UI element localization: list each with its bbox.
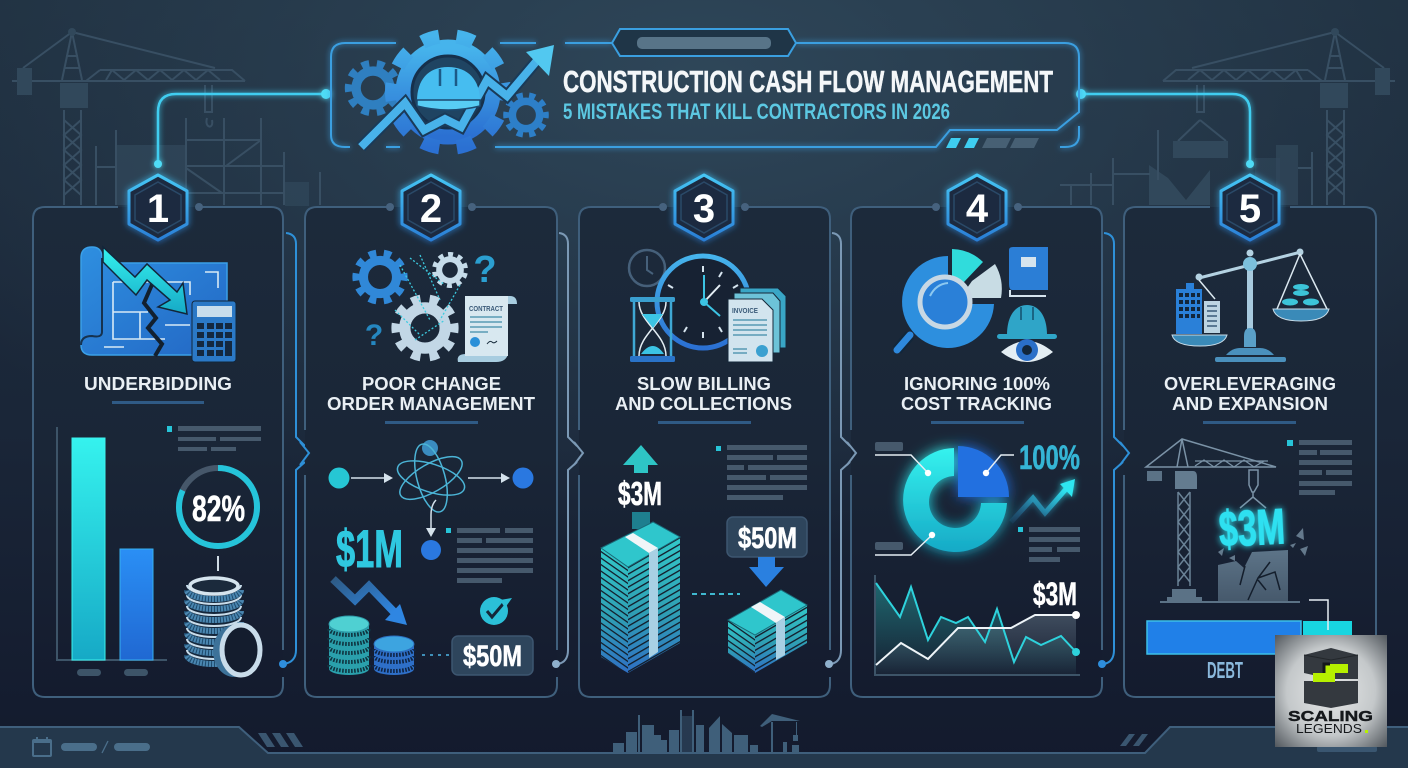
text placeholder lines [446,528,533,583]
icon: coin stack [187,578,260,677]
heading: ORDER MANAGEMENT [327,394,535,414]
debt bar: DEBT [1207,657,1243,683]
value box: $50M: $50M [463,640,522,673]
icon: blueprint, falling arrow, calculator [81,247,236,362]
logo wordmark: SCALING [1288,709,1373,725]
header corner ticks [946,138,1039,148]
value box: $50M with down arrow: $50M [738,522,797,555]
value box: $50M [452,636,533,675]
badge 4: 4 [966,187,989,231]
badge 2 [402,175,460,240]
heading: IGNORING 100% [904,374,1050,394]
badge 3 [675,175,733,240]
value box: $50M with down arrow [727,517,807,587]
panel 1: underbidding [33,175,305,697]
dotted connector [422,654,452,656]
panel frame [33,203,305,697]
background construction scene: left crane and scaffolding [12,28,320,206]
badge 5 [1221,175,1279,240]
icon: broken gears, question marks, contract [356,249,517,362]
text placeholder lines [167,426,261,451]
badge 2: 2 [420,187,442,231]
footer right pill [1317,746,1377,752]
panel 2: poor change order management [300,175,577,697]
connector lines from header to step 1 and step 5 [154,89,1254,168]
icon: calendar [32,737,52,757]
footer stripes left [258,733,303,747]
heading: UNDERBIDDING [84,374,232,394]
heading [327,374,535,414]
flow diagram: tangled process [328,440,534,560]
badge 5: 5 [1239,187,1261,231]
figure: $1M: $1M [336,520,403,579]
badge 1: 1 [147,187,169,231]
rubble block with cracks [1218,528,1308,601]
icon: broken gears, question marks, contract: ? [365,319,383,352]
footer date placeholders [61,741,150,753]
logo wordmark: LEGENDS [1296,721,1362,736]
badge 3: 3 [693,187,715,231]
logo mark [1304,648,1358,708]
heading underline [112,401,204,404]
header panel [331,29,1079,148]
bar chart [57,427,167,676]
title: CONSTRUCTION CASH FLOW MANAGEMENT [563,64,1053,99]
donut stat 82% [179,468,257,571]
heading: POOR CHANGE [362,374,501,394]
donut chart with 100% [875,439,1080,555]
debt bar [1147,600,1352,683]
text placeholder lines [716,445,807,500]
arrow: falling [333,579,407,625]
heading [615,374,792,414]
heading underline [658,421,751,424]
header frame [331,43,1079,147]
icon: balance scale with building and coins [1172,248,1329,362]
donut stat 82%: 82% [192,488,245,529]
logo wordmark [1288,709,1373,736]
icon: coins [329,616,414,675]
icon: crane [1146,439,1300,602]
icon: pie chart with magnifier, book, hard hat and eye [897,247,1057,362]
icon: broken gears, question marks, contract: ? [473,249,497,291]
footer bar [0,710,1408,768]
donut chart with 100%: 100% [1019,439,1080,477]
icon: clocks, hourglass, invoices [629,250,786,362]
figure: $3M glowing: $3M [1217,498,1286,558]
text placeholder lines [1287,440,1352,495]
badge 4 [948,175,1006,240]
badge 1 [129,175,187,240]
panel frame [300,203,577,697]
heading: AND EXPANSION [1172,394,1328,414]
icon: tall cash stack [601,522,680,673]
heading: AND COLLECTIONS [615,394,792,414]
arrow: rising [1011,479,1075,522]
heading underline [1203,421,1296,424]
panel frame [1120,207,1376,697]
heading [901,374,1052,414]
icon: small cash stack [728,590,807,673]
background construction scene: right crane, block and ruin [1060,28,1395,205]
heading underline [385,421,478,424]
panel frame [847,203,1123,697]
line chart [875,575,1080,675]
panel frame [574,203,850,697]
icon: clocks, hourglass, invoices: INVOICE [732,306,758,315]
heading: OVERLEVERAGING [1164,374,1336,394]
arrow up with $3M: $3M [618,475,662,512]
heading [1164,374,1336,414]
line chart: $3M [1033,576,1077,612]
footer stripes right [1120,734,1148,746]
icon: broken gears, question marks, contract: CONTRACT [469,304,503,313]
icon: gears, hard hat and rising arrow [349,36,554,148]
panel 3: slow billing and collections [574,175,850,697]
heading: SLOW BILLING [637,374,771,394]
arrow up with $3M [618,445,662,529]
heading underline [931,421,1024,424]
dotted connector [692,593,740,595]
panel 4: ignoring 100% cost tracking [847,175,1123,697]
text placeholder lines [1018,527,1080,562]
icon: check badge [480,597,512,625]
logo: Scaling Legends [1275,635,1387,747]
panel 5: overleveraging and expansion [1120,175,1376,697]
subtitle: 5 MISTAKES THAT KILL CONTRACTORS IN 2026 [563,99,950,124]
heading: COST TRACKING [901,394,1052,414]
footer skyline [613,710,800,753]
header top tab [612,29,796,56]
